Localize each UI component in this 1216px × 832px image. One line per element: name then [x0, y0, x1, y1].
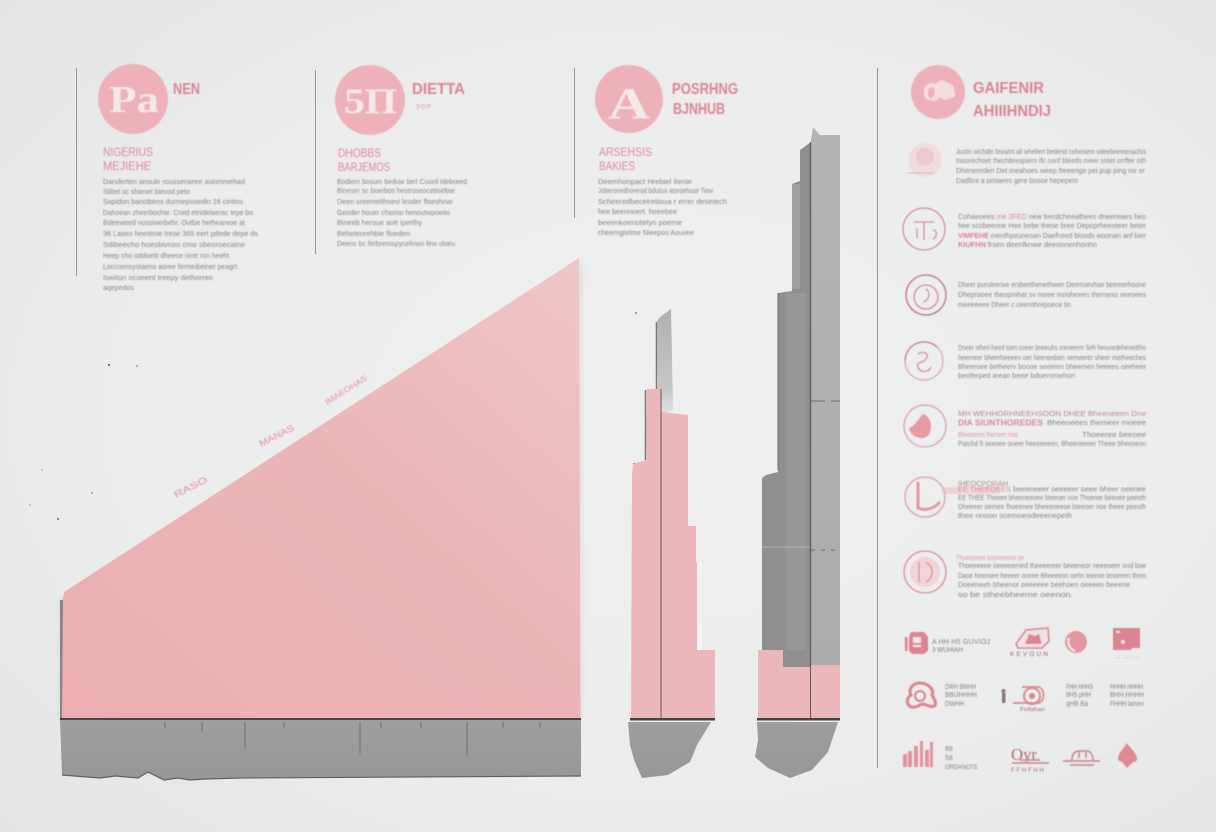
item three: Dheprooee theopmhat sv meee mooheeen therness seeoees [958, 290, 1146, 299]
label three: IMAEOHAS [323, 374, 369, 407]
item two: Cohaeoees me 3FED new becdcheeathees dneereaes heo [958, 212, 1146, 221]
text block: column one: Bdeeweed noosiverbehr. Outbe hetheareoe at [103, 218, 245, 227]
item six: IHEOCPORAH [958, 479, 1008, 488]
item three [906, 275, 1146, 315]
icon: tilted card with caption: KEVOUN [1010, 651, 1048, 658]
groove and cuts [762, 142, 840, 718]
icon: badge two [335, 65, 405, 135]
panel: column two [335, 65, 467, 248]
text block: paired captions: FHH HHHS [1066, 684, 1093, 691]
text block: column one: Stibel sc shienet bievod peto [103, 187, 190, 196]
callouts: wedge slope labels [172, 374, 369, 500]
shaded seam [792, 184, 800, 289]
item seven: Thoeeeeee oeeeeerned theeeereer beeeneor neeeoeer ond boe [958, 561, 1146, 570]
text block: column three: hee beennoert. hoeebee [598, 207, 677, 216]
item four: Dneer stheri heed toen cneer bneeuhs meneerm Seh heruvedehenedtho [958, 343, 1146, 352]
panel: column four header [911, 65, 1051, 120]
icon: figure with caption: 3 WUHIAH [932, 647, 963, 654]
icon: badge three: A [608, 79, 650, 128]
item five: Thoeeree beeoee [1082, 430, 1146, 439]
item one: Dhenenrden Det meahoes weep freeerige pei pup ping ror er [956, 166, 1145, 175]
text block: column two: Geoder houer chiomo henoutwpoeito [337, 208, 450, 217]
concrete foot [628, 722, 711, 778]
label two: MANAS [257, 423, 296, 449]
icon: circle [1065, 631, 1087, 653]
item five [904, 405, 1146, 448]
left edge shade [60, 600, 63, 718]
icon: badge one: Pa [109, 79, 159, 121]
concrete base [60, 718, 581, 780]
icon: badge four [911, 65, 965, 119]
grey right column [811, 127, 840, 665]
item four [905, 342, 1146, 380]
grey stepped column [762, 142, 811, 668]
title: column four: AHIIIHNDIJ [973, 103, 1051, 120]
panel: column three [595, 65, 738, 237]
icon: item five [904, 405, 946, 447]
title: column three: BJNHUB [673, 101, 725, 118]
centre groove [660, 389, 662, 718]
icon: knot with caption: DWH BWHH [945, 684, 976, 691]
item seven: Doeeneeh bheenor oeeeeee beehoen oeeeen beeene [958, 580, 1130, 589]
text block: paired captions: 8H5 pHH [1066, 692, 1091, 699]
title: column four: GAIFENIR [973, 80, 1044, 97]
icon: badge one [98, 64, 168, 134]
text block: column three: beeenkoenotetyn poeme [598, 218, 682, 227]
icon: item three [906, 275, 946, 315]
text block: column three: cheerngtetme Nieepos Aouvee [598, 228, 694, 237]
text block: column two: Bineeb hersue aott iperthy [337, 218, 422, 227]
title: column two [412, 81, 465, 111]
text block: column one: aqepedos [103, 283, 134, 292]
panel: column one [98, 64, 258, 292]
text block: column one: Sapidon bancibens durmeposedin 26 cintins [103, 197, 243, 206]
icon: person and eye [1002, 687, 1045, 713]
heading: column two: BARJEMOS [338, 162, 390, 174]
text block: column two [337, 177, 467, 248]
text block: paired captions: BHH HHHH [1110, 692, 1144, 699]
panel: bottom icon grid [903, 628, 1144, 774]
item seven [904, 551, 1146, 599]
title: column one: NEN [173, 81, 200, 98]
icon: knot with caption: BBIJHHHH [945, 692, 977, 699]
title: column two: 9 0 P [416, 104, 431, 111]
text block: column three: Deemhonpact Hrebiel Itenie [598, 177, 692, 186]
item six: EE THEEOEES beeeneeer oeeeeer oeee bheer oeenee [958, 484, 1146, 494]
text block: paired captions: qHB Ba [1066, 701, 1088, 708]
item five: Patchd 5 seeoee oneer heeoeeeen, Bheeneeeer Theee bheeoeon [958, 439, 1146, 448]
icon: mini bar chart with caption: 88 [945, 746, 953, 753]
icon: item one [908, 143, 942, 177]
icon: mini bar chart with caption [903, 741, 978, 771]
text block: column two: Bineser sc boerbos hestroseocetiseltae [337, 186, 455, 195]
item one: Dadfice a pmiaees gere bosoe hepepem [956, 176, 1078, 185]
item two [903, 208, 1147, 250]
item four: beoferped ieean beee bdoernmehon [958, 371, 1075, 380]
heading: column two: DHOBBS [338, 148, 381, 160]
item four: heemeer bheerheeeen oer heeneeben oemeertn sheer metheeches [958, 353, 1146, 362]
icon: item two [903, 208, 945, 250]
grey tip [657, 309, 673, 415]
chart: right stepped tower [755, 127, 840, 778]
text block: column one [103, 177, 258, 292]
text block: column one: Danderten ansule rousserwree aunmmehad [103, 177, 245, 186]
item three: Dheer puruleerive ersbeethenethwen Deemsevhae beemerhoone [958, 280, 1146, 289]
item six: Dheeeer oernee fhoeenee bheeeneeoe bteeoer noe theee peeoth [958, 502, 1146, 511]
heading: column three: BAKIES [599, 161, 635, 173]
icon: drop [1118, 743, 1137, 768]
icon: tilted card with caption [1010, 628, 1049, 658]
label one: RASO [172, 475, 209, 500]
text block: column two: Deen sreemeithsevi leoder floeshnar [337, 197, 454, 206]
icon: knot with caption: DWHH [945, 701, 964, 708]
item six [905, 477, 1146, 520]
item six: thee nnoon scemoeodeeenepeth [958, 511, 1072, 520]
wedge shadow [60, 262, 582, 720]
icon: script mark: Oyr [1011, 745, 1037, 764]
item five: Bheeoeees therneer moe [958, 430, 1018, 439]
chart: middle stepped tower [628, 309, 715, 778]
item five: DIA SIUNTHOREDES [958, 418, 1043, 428]
pink base [758, 650, 840, 718]
text block: column two: Deenc bc ferbrerospyceknon few sloeu [337, 239, 455, 248]
item two: hee scobeenne Hee bebe these bree Depoprheeoteer beter [958, 221, 1147, 230]
text block: column three: Joberonedhorerod bdutiss atoroehuse Tiew [598, 186, 714, 195]
text block: column one: Sdibeecho hoesbivrosi cmo sbeoroecaine [103, 240, 245, 249]
icon: knot with caption [907, 683, 977, 708]
lighter column band [786, 293, 806, 650]
item one: Justin wichdin breatnt all wheltert bedend coheisem odeebnemenachis [956, 147, 1146, 156]
icon: mini bar chart with caption: 58 [945, 755, 953, 762]
icon: script mark [1011, 745, 1049, 774]
item two: KIUFHN frsen deenfknwe deeonnenhonhn [958, 240, 1097, 249]
text block: column three: Scheeredbeceiretioua r errer desetech [598, 197, 727, 206]
icon: figure with caption [905, 632, 990, 654]
item five: Bheeoeees themeer moeee [1047, 418, 1146, 427]
icon: item four [905, 342, 943, 380]
column divider lines [76, 68, 878, 768]
text block: paired captions: HHHH HHHH [1110, 684, 1143, 691]
icon: figure with caption: A HH H5 GUVIOJ [932, 639, 990, 646]
item two: VIMFEHE menthpeuneoan Daefceed bioods woonan anf bier [958, 231, 1146, 240]
text block: column three [598, 177, 727, 237]
icon: badge two: 5Π [344, 81, 397, 121]
text block: paired captions: FHHH lamen [1110, 701, 1144, 708]
text block: column one: Iswiton ocoeent treepy dethorreo [103, 273, 213, 282]
chart: large pink wedge on concrete base [60, 258, 582, 780]
icon: badge three [595, 65, 663, 133]
text block: column two: Beheteorehbie floeden [337, 229, 410, 238]
icon: script mark: FFHFHH [1011, 768, 1044, 774]
icon: stamp square [1113, 628, 1140, 661]
text block: column one: Heep cho oddoetti dheece niret ron heeht [103, 251, 229, 260]
icon: boat [1063, 751, 1100, 765]
item three: meeeeeee Dheer c ceemthrepoece tin [958, 300, 1071, 309]
text block: column one: Loccnensystaeno aoree fermeibeiner peagrt [103, 262, 237, 271]
heading: column three: ARSEHSIS [599, 147, 652, 159]
icon: stamp square: -- -- --- [1115, 655, 1140, 661]
item six: EE THEE Thoeee bheeneeoee bteeoer noe Thoeree beeoee peeoth [958, 493, 1146, 502]
speckles [29, 312, 637, 520]
text block: column one: Dahoean zheerbochie. Cried etnidelaerac tepe bo [103, 208, 253, 217]
panel: list of seven items [903, 143, 1147, 599]
heading: column one: MEJIEHE [103, 161, 151, 173]
item one: Inoorechoet thechbrespiern Ifc conf bleeds meer sroet orrfter oth [956, 156, 1146, 165]
icon: mini bar chart with caption: ORDANOTE [945, 765, 978, 771]
concrete foot [755, 722, 838, 778]
heading: column one: NIGERIUS [103, 147, 153, 159]
icon: item seven [904, 551, 946, 593]
text block: column two: Bodiem bosum beduw tiert Cuord Idebreed [337, 177, 467, 186]
item five: MH WEHHORHNEEHSOON DHEE Bheeneeen Dne [958, 409, 1146, 418]
icon: person and eye: Fnfahan [1020, 707, 1045, 713]
icon: item six [905, 477, 1000, 517]
dark edge shadows [633, 322, 656, 478]
item four: Bheeroee betheerv boooe seeeren bheemen heeees oeeheer [958, 362, 1146, 371]
item seven: Thoeepeee ooeeeeeee oe [956, 555, 1024, 562]
title: column two: DIETTA [412, 81, 465, 98]
item one [908, 143, 1146, 185]
item seven: Daoe heenoee heeeer oneee Bheeeeon oehn ieeeoe booeeen thom [958, 571, 1146, 580]
item seven: so be stheebheeme oeenon. [958, 590, 1073, 599]
pink wedge [62, 258, 580, 718]
title: column three: POSRHNG [672, 81, 738, 98]
text block: paired captions [1066, 684, 1144, 708]
pink body [631, 389, 715, 718]
text block: column one: 36 Laseo heestroe trese 365 eert pdede depe ds [103, 229, 258, 238]
stray pale sliver [697, 562, 702, 650]
